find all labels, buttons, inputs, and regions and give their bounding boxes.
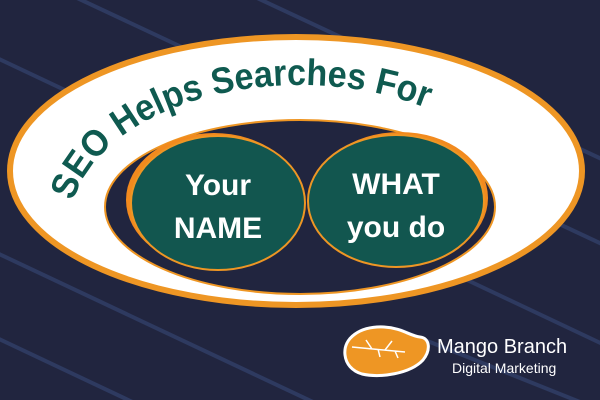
logo: Mango Branch: Digital Marketing: [452, 360, 556, 376]
logo: Mango Branch: [345, 327, 567, 376]
outer ellipse: [10, 37, 582, 305]
circle: WHAT you do: [308, 132, 488, 267]
circle: Your NAME: NAME: [174, 212, 262, 245]
circle: Your NAME: Your: [185, 169, 251, 202]
circle: Your NAME: [126, 133, 305, 270]
icon: mango: [345, 327, 428, 375]
logo: Mango Branch: Mango Branch: [437, 336, 567, 358]
circle: WHAT you do: WHAT: [352, 168, 440, 201]
circle: WHAT you do: you do: [347, 211, 445, 244]
title: SEO Helps Searches For: SEO Helps Searches For: [52, 58, 433, 198]
inner ellipse: [105, 120, 495, 294]
